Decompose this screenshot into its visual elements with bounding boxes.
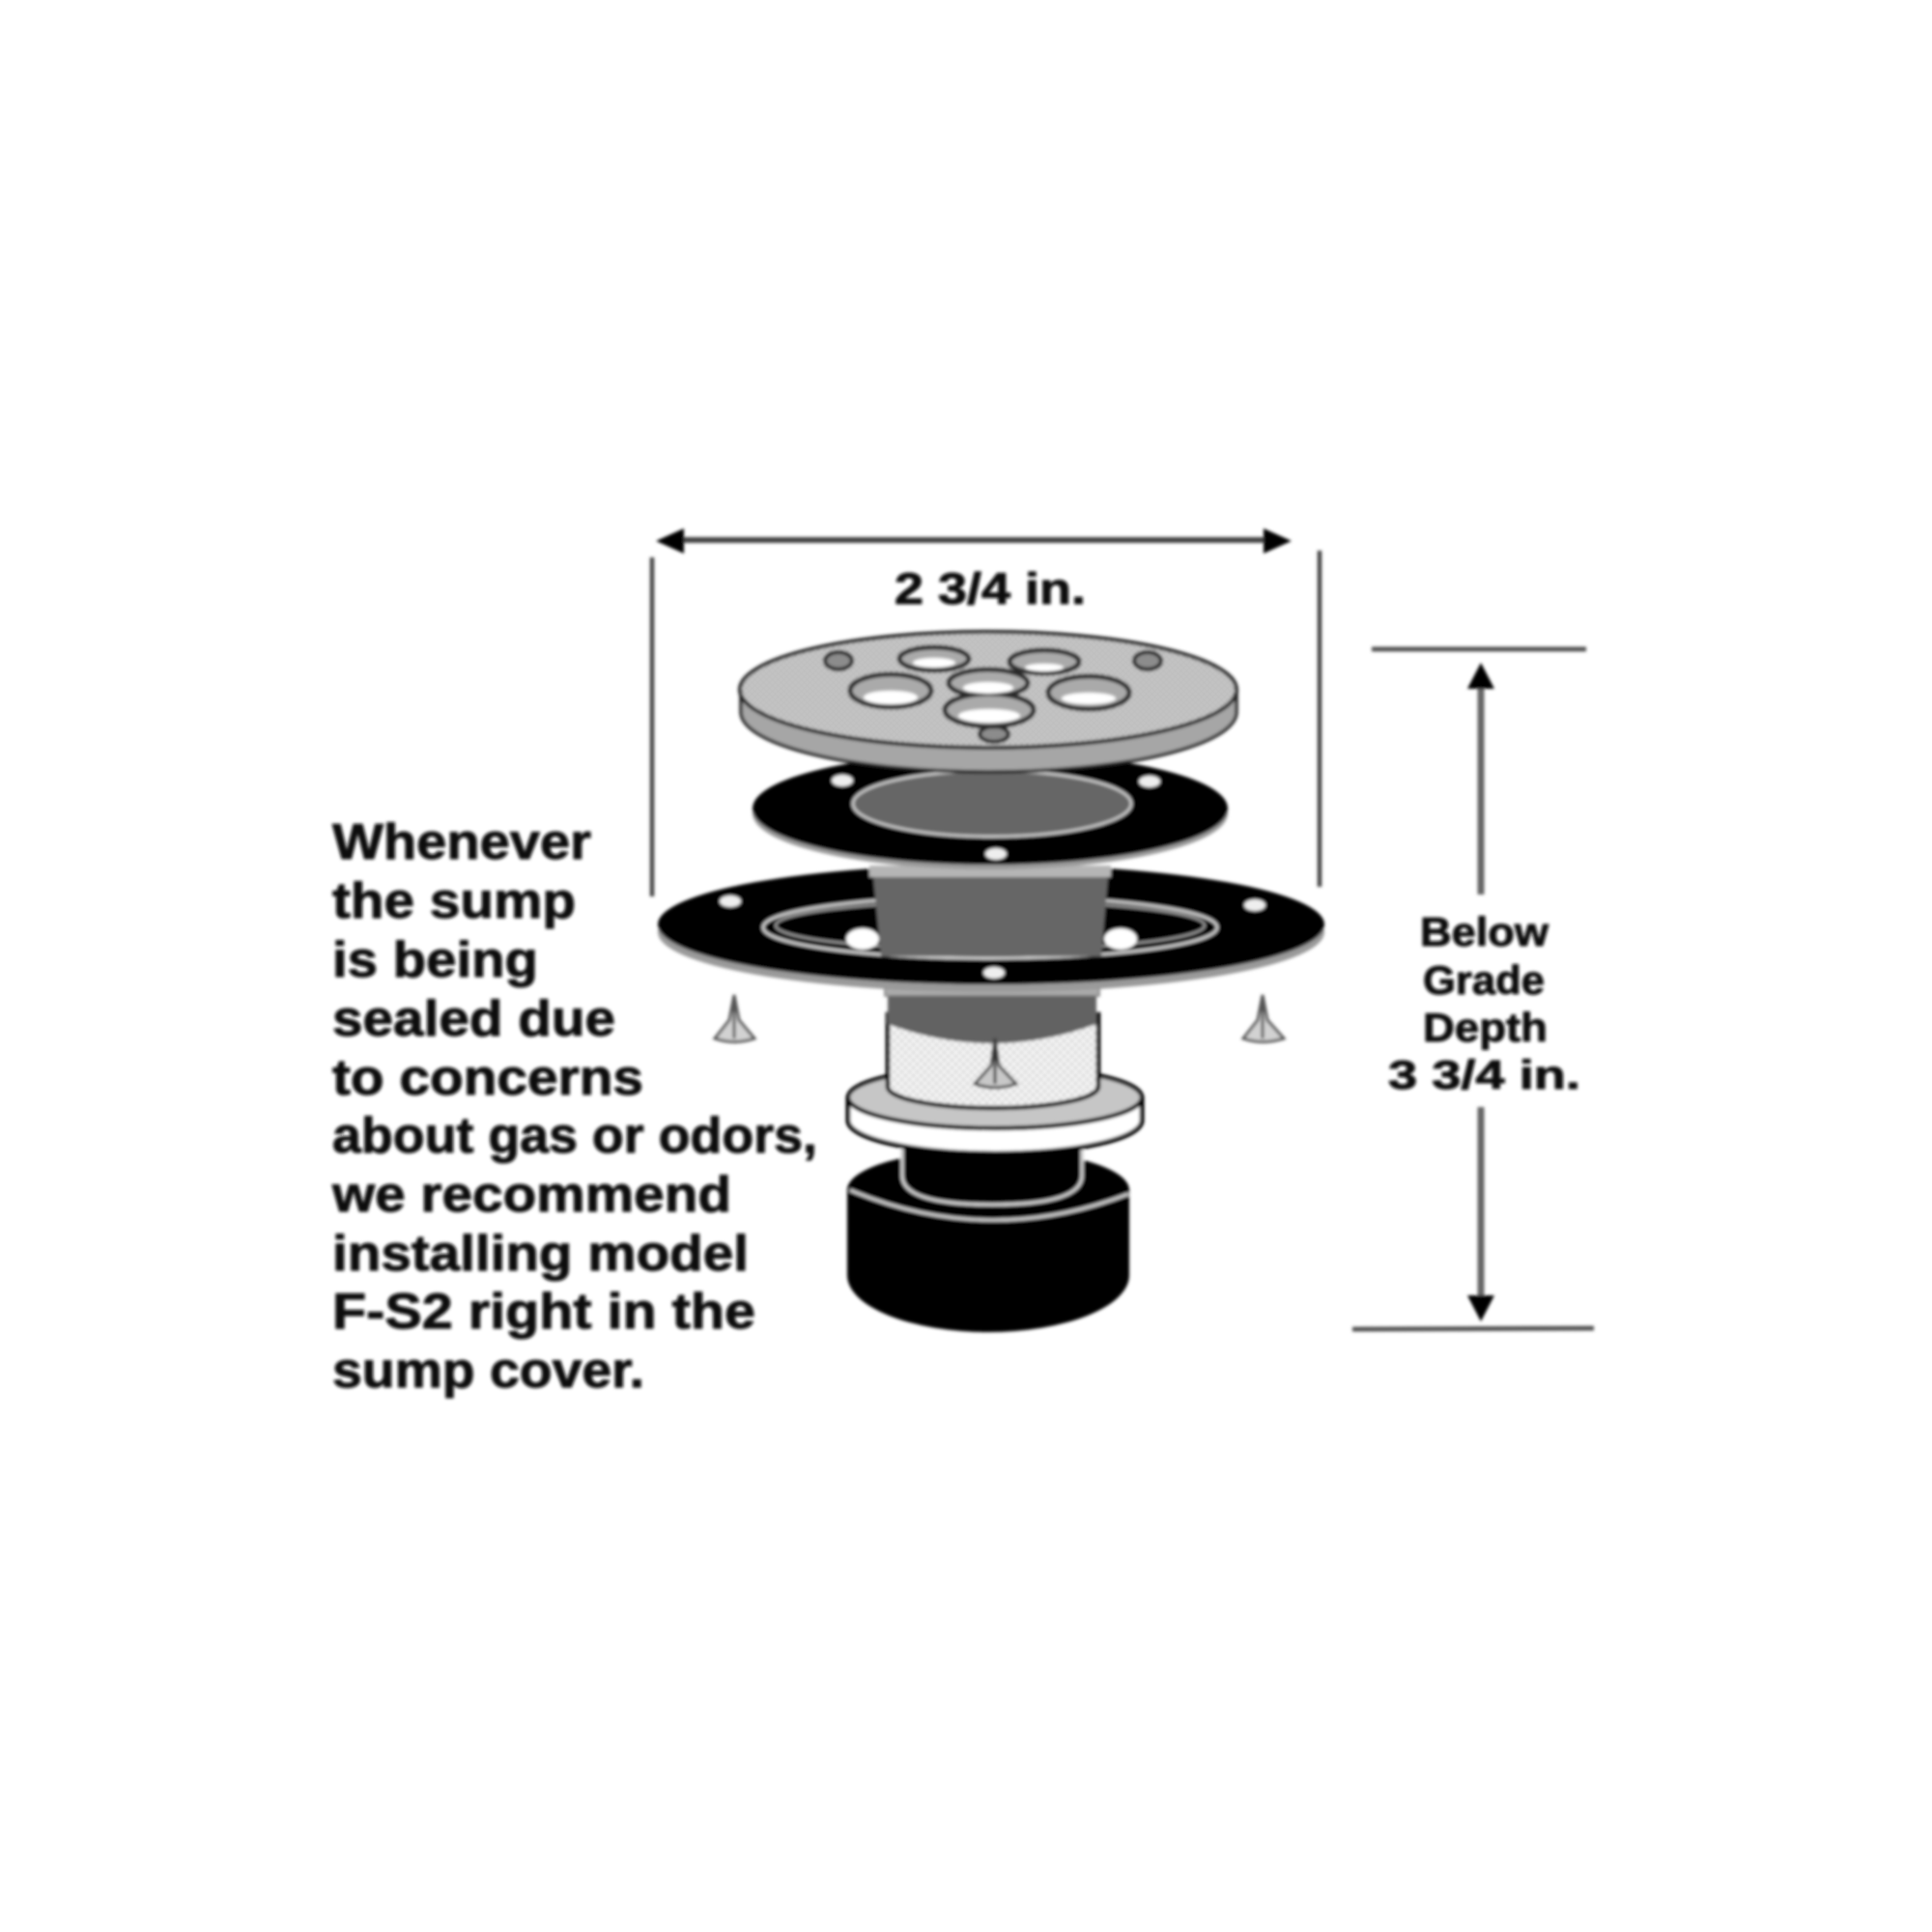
recommendation text block: Whenever (332, 814, 591, 870)
dimension arrow: width (656, 528, 1292, 554)
recommendation text block: we recommend (331, 1167, 731, 1223)
recommendation text block: F-S2 right in the (332, 1284, 755, 1340)
dimension arrow: depth (1467, 663, 1494, 1321)
bolt heads (825, 652, 1161, 742)
lower collar flange (848, 1066, 1142, 1153)
depth label (1388, 909, 1580, 1097)
black neck (902, 1140, 1082, 1205)
perforated top plate (740, 632, 1236, 772)
recommendation text block: to concerns (332, 1050, 643, 1106)
recommendation text block (331, 814, 817, 1399)
width label: 2 3/4 in. (895, 564, 1086, 613)
screw: center (975, 1038, 1016, 1088)
depth label: Grade (1423, 957, 1545, 1003)
large lower flange (658, 865, 1324, 992)
depth label: Below (1420, 909, 1548, 954)
screw: left (715, 995, 754, 1041)
depth limit lines (1352, 649, 1594, 1329)
recommendation text block: is being (332, 932, 538, 988)
hole openings (864, 658, 1116, 723)
depth label: 3 3/4 in. (1388, 1052, 1580, 1097)
recommendation text block: sealed due (332, 991, 615, 1047)
recommendation text block: about gas or odors, (332, 1108, 817, 1164)
plate holes (850, 647, 1129, 726)
recommendation text block: sump cover. (332, 1343, 644, 1399)
recommendation text block: installing model (332, 1226, 749, 1282)
dimension extension lines (652, 551, 1320, 896)
middle gasket (753, 753, 1228, 869)
depth label: Depth (1423, 1005, 1548, 1050)
recommendation text block: the sump (332, 873, 576, 929)
screw: right (1243, 995, 1284, 1041)
black rubber cup (847, 1150, 1129, 1332)
grey tube upper section (869, 866, 1111, 956)
dotted cylinder (888, 1014, 1098, 1108)
grey tube lower section (885, 987, 1099, 1043)
